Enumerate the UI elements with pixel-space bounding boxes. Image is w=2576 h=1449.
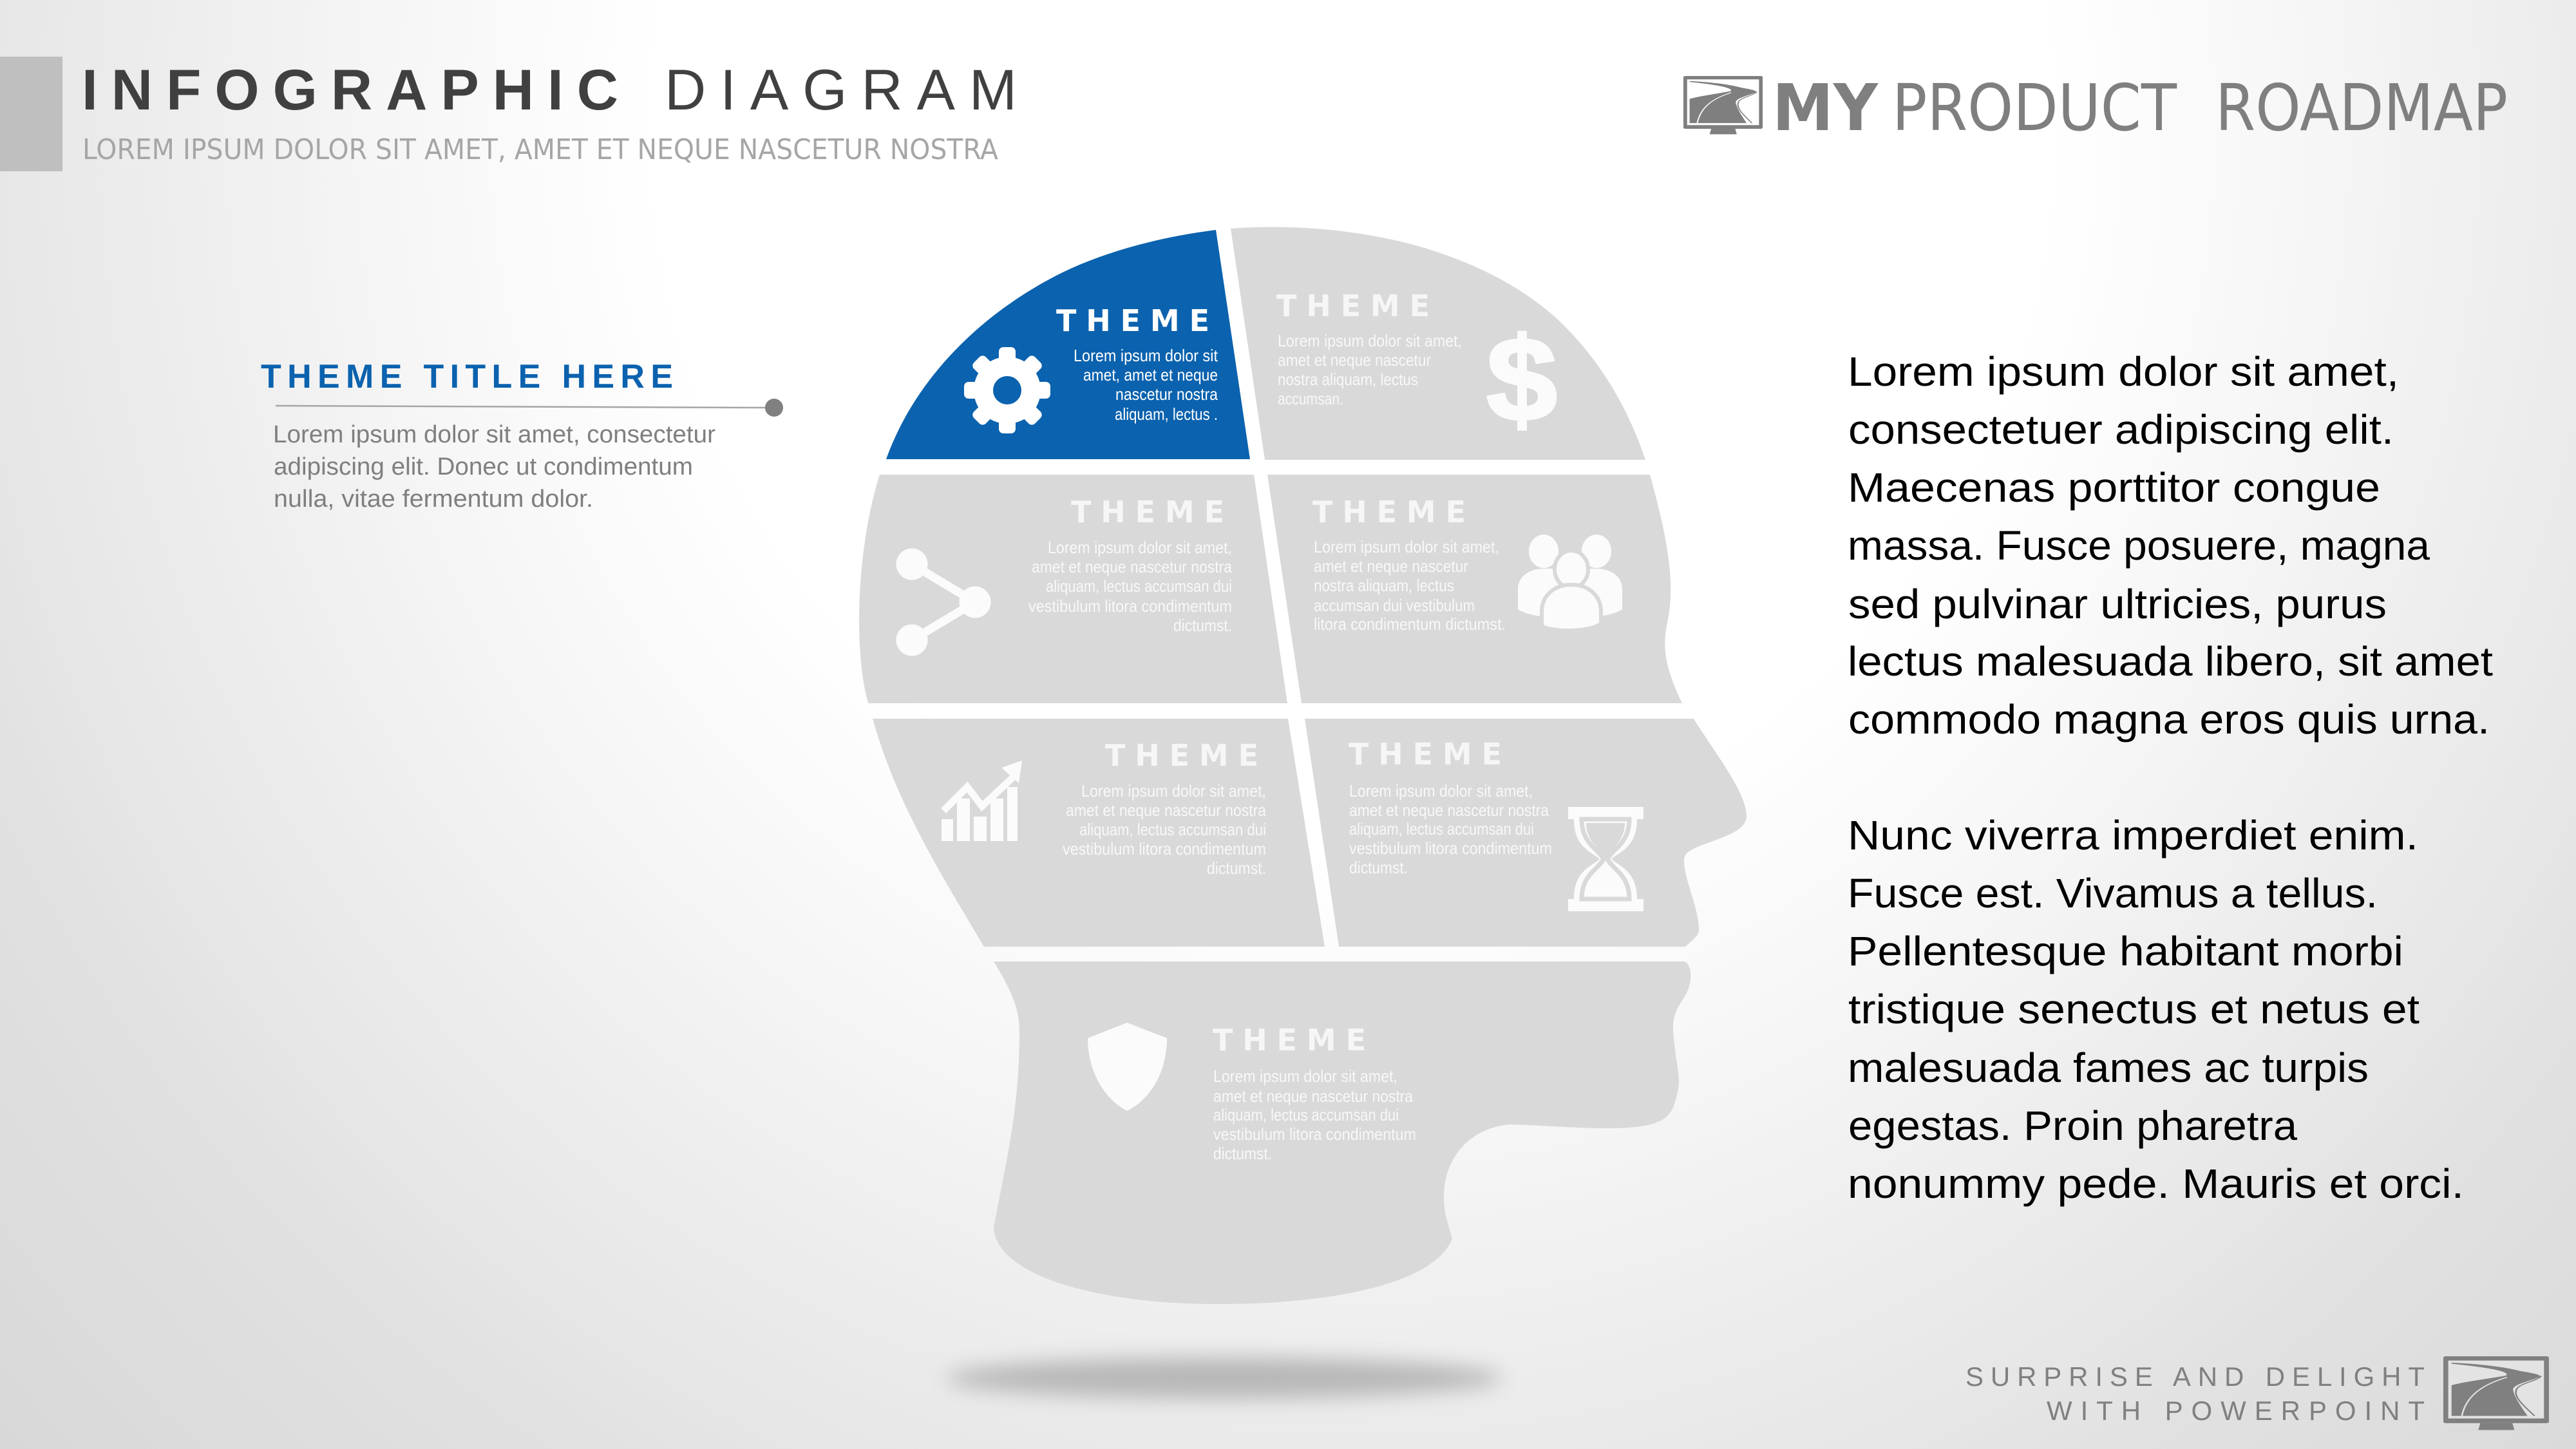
footer tagline: SURPRISE AND DELIGHT (1965, 1361, 2425, 1392)
brand heading: ROADMAP (2215, 70, 2508, 146)
callout: theme title (261, 358, 783, 513)
text block: amet et neque nascetur nostra (1349, 800, 1549, 820)
panel: theme dollar (1231, 227, 1645, 460)
heading: THEME (1105, 738, 1258, 773)
panel: theme shield (994, 961, 1690, 1304)
icon: rising chart (942, 761, 1022, 841)
text block: amet et neque nascetur nostra (1213, 1086, 1413, 1106)
callout connector (276, 399, 783, 417)
head diagram (859, 227, 1747, 1304)
panel: theme people (1267, 475, 1682, 703)
icon: gear (964, 347, 1050, 433)
brand heading (1772, 70, 2508, 146)
paragraph one: massa. Fusce posuere, magna (1848, 522, 2430, 569)
paragraph two: Nunc viverra imperdiet enim. (1848, 812, 2418, 858)
icon: share (896, 549, 990, 656)
text block (1314, 537, 1506, 634)
text block (1349, 781, 1552, 877)
brand heading: MY (1772, 70, 1879, 146)
callout text: Lorem ipsum dolor sit amet, consectetur (273, 421, 715, 448)
heading: THEME (1312, 495, 1466, 529)
text block: Lorem ipsum dolor sit amet, (1278, 331, 1462, 350)
paragraph two: Pellentesque habitant morbi (1848, 928, 2403, 974)
paragraph one: Lorem ipsum dolor sit amet, (1848, 348, 2399, 395)
text block: amet et neque nascetur nostra (1066, 800, 1266, 820)
icon: dollar: $ (1486, 314, 1557, 446)
text block: Lorem ipsum dolor sit amet, (1314, 537, 1499, 556)
text block (1063, 781, 1266, 878)
heading: THEME (1056, 303, 1209, 338)
paragraph two: tristique senectus et netus et (1848, 986, 2420, 1032)
text block: dictumst. (1349, 858, 1408, 877)
icon: people (1518, 535, 1622, 630)
callout text: nulla, vitae fermentum dolor. (274, 486, 593, 513)
heading: THEME (1349, 737, 1502, 772)
brand heading: PRODUCT (1892, 70, 2177, 146)
text block: amet, amet et neque (1083, 365, 1218, 384)
paragraph one: lectus malesuada libero, sit amet (1848, 638, 2493, 685)
text block: right column (1848, 348, 2493, 1207)
text block: Lorem ipsum dolor sit amet, (1048, 538, 1232, 557)
text block: amet et neque nascetur nostra (1032, 557, 1232, 576)
subtitle: LOREM IPSUM DOLOR SIT AMET, AMET ET NEQUE NASCETUR NOSTRA (82, 133, 998, 166)
paragraph two: malesuada fames ac turpis (1848, 1045, 2369, 1091)
text block (1213, 1066, 1416, 1163)
icon: hourglass (1568, 807, 1643, 911)
text block: accumsan. (1278, 389, 1343, 408)
text block: dictumst. (1207, 858, 1266, 878)
heading: THEME (1276, 289, 1430, 323)
text block: nascetur nostra (1115, 384, 1218, 404)
text block (1028, 538, 1232, 635)
paragraph one: consectetuer adipiscing elit. (1848, 406, 2394, 453)
footer tagline (1965, 1361, 2425, 1426)
icon: roadmap logo footer (2443, 1356, 2549, 1430)
text block: amet et neque nascetur (1278, 350, 1431, 370)
text block: litora condimentum dictumst. (1314, 614, 1506, 634)
panel: theme blue gear (886, 230, 1250, 459)
footer tagline: WITH POWERPOINT (2047, 1396, 2425, 1426)
title accent block (0, 57, 62, 171)
paragraph one (1848, 348, 2493, 743)
head shadow (946, 1358, 1502, 1399)
panel: theme chart (873, 719, 1325, 947)
title (82, 57, 1017, 122)
paragraph two (1848, 812, 2464, 1207)
title: INFOGRAPHIC (82, 57, 618, 122)
text block: nostra aliquam, lectus (1314, 576, 1454, 595)
text block: dictumst. (1173, 616, 1232, 635)
text block: aliquam, lectus accumsan dui (1046, 576, 1232, 596)
panel: theme share (859, 475, 1287, 703)
icon: shield (1088, 1023, 1167, 1111)
paragraph two: egestas. Proin pharetra (1848, 1103, 2297, 1149)
callout text: adipiscing elit. Donec ut condimentum (274, 453, 693, 480)
paragraph one: Maecenas porttitor congue (1848, 464, 2380, 511)
text block: accumsan dui vestibulum (1314, 596, 1475, 615)
text block: aliquam, lectus accumsan dui (1349, 819, 1534, 838)
title: DIAGRAM (665, 57, 1017, 122)
callout text (273, 421, 715, 513)
text block: vestibulum litora condimentum (1028, 596, 1232, 616)
text block: Lorem ipsum dolor sit amet, (1081, 781, 1266, 800)
icon: roadmap logo top (1683, 76, 1763, 134)
callout heading: THEME TITLE HERE (261, 358, 673, 395)
text block: Lorem ipsum dolor sit amet, (1213, 1066, 1397, 1086)
paragraph one: sed pulvinar ultricies, purus (1848, 581, 2387, 627)
text block: aliquam, lectus accumsan dui (1213, 1105, 1399, 1124)
text block (1278, 331, 1462, 408)
heading: THEME (1071, 495, 1224, 529)
paragraph one: commodo magna eros quis urna. (1848, 696, 2490, 743)
paragraph two: Fusce est. Vivamus a tellus. (1848, 870, 2378, 916)
panel: theme hourglass (1305, 719, 1747, 947)
text block: vestibulum litora condimentum (1063, 839, 1266, 858)
text block: Lorem ipsum dolor sit (1074, 346, 1218, 365)
text block: aliquam, lectus accumsan dui (1079, 820, 1266, 839)
text block: vestibulum litora condimentum (1213, 1124, 1416, 1144)
text block (1074, 346, 1218, 424)
text block: Lorem ipsum dolor sit amet, (1349, 781, 1533, 800)
text block: aliquam, lectus . (1115, 404, 1218, 424)
text block: dictumst. (1213, 1144, 1272, 1163)
text block: nostra aliquam, lectus (1278, 370, 1418, 389)
text block: vestibulum litora condimentum (1349, 838, 1552, 858)
heading: THEME (1213, 1023, 1366, 1057)
paragraph two: nonummy pede. Mauris et orci. (1848, 1160, 2464, 1207)
text block: amet et neque nascetur (1314, 556, 1468, 576)
